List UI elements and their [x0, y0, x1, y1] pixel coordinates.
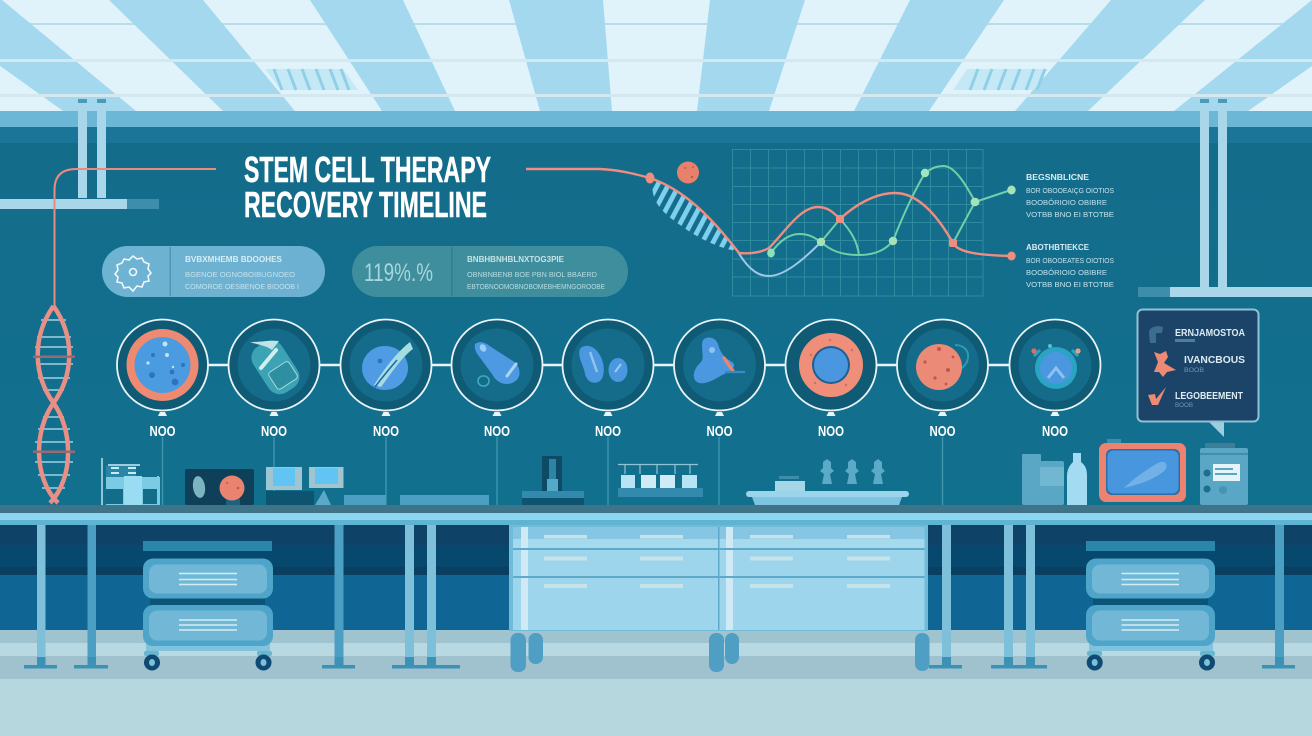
- green curve: [771, 166, 1011, 255]
- ceiling: [0, 0, 1312, 111]
- icon: gear cell: [115, 256, 151, 291]
- pill: cell summary: BVBXMHEMB BDOOHES: [185, 255, 283, 264]
- stage 2: capsule device: NOO: [261, 423, 287, 440]
- callout panel: [1138, 310, 1258, 437]
- pill: percentage: BNBHBNHBLNXTOG3PIE: [467, 255, 565, 264]
- stage 4: elongated cell: NOO: [484, 423, 510, 440]
- equipment: analyser device: [1200, 443, 1248, 505]
- stage 5: dividing cells: NOO: [595, 423, 621, 440]
- stage 2: capsule device: [228, 320, 320, 440]
- equipment: cabinet and bottle: [1022, 453, 1087, 505]
- data points: [646, 169, 1016, 260]
- ceiling vent left: [265, 69, 358, 90]
- pill: percentage: [352, 246, 628, 297]
- stage 7: ringed cell: NOO: [818, 423, 844, 440]
- equipment: salmon monitor: [1099, 439, 1186, 502]
- stage 9: regenerated cell: NOO: [1042, 423, 1068, 440]
- equipment: monitors and flask: [266, 467, 489, 505]
- stage 4: elongated cell: [452, 320, 542, 440]
- equipment: column press: [522, 456, 584, 505]
- icon: callout item one: [1149, 326, 1163, 343]
- stem lines: [162, 437, 942, 505]
- stage 6: cell with marker: [674, 320, 765, 440]
- pipes right: [1138, 99, 1312, 297]
- callout panel: BOOB: [1175, 403, 1193, 409]
- blue curve: [738, 242, 821, 276]
- DNA helix: [33, 306, 75, 503]
- ceiling vent right: [953, 69, 1048, 90]
- stage 5: dividing cells: [562, 320, 654, 440]
- chart legend top: [1026, 173, 1114, 219]
- pill: percentage: EBTOBNOOMOBNOBOMEBHEMNGOROOBE: [467, 282, 605, 291]
- stage 7: ringed cell: [786, 320, 876, 440]
- hatched area: [651, 179, 736, 251]
- central drawer unit: [509, 525, 928, 631]
- icon: floating cell: [677, 162, 699, 184]
- stage 9: regenerated cell: [1010, 320, 1100, 440]
- wheels: [1087, 654, 1215, 670]
- title: [244, 149, 491, 225]
- icon: callout checkmark: [1148, 387, 1166, 405]
- chart legend bottom: ABOTHBTIEKCE: [1026, 243, 1090, 252]
- pill: cell summary: COMOROE OESBENOE BIDOOB I: [185, 282, 299, 291]
- chart legend bottom: BOR OBOOEATES OIOTIOS: [1026, 256, 1114, 265]
- recovery chart: [526, 149, 1016, 296]
- lower wall: [0, 525, 1312, 630]
- title: RECOVERY TIMELINE: [244, 184, 487, 225]
- chart legend top: BOOBÓRIOIO OBIBRE: [1026, 198, 1107, 207]
- drawer unit feet: [510, 633, 930, 672]
- timeline connector: [208, 364, 1010, 366]
- cart left: [143, 541, 273, 670]
- stage 3: cell and pipette: NOO: [373, 423, 399, 440]
- chart legend top: VOTBB BNO EI BTOTBE: [1026, 210, 1114, 219]
- wheels: [144, 654, 272, 670]
- pill: cell summary: BGENOE OGNOBOIBUGNOEO: [185, 270, 295, 279]
- cart right: [1086, 541, 1215, 670]
- callout panel: ERNJAMOSTOA: [1175, 327, 1245, 339]
- chart legend bottom: BOOBÓRIOIO OBIBRE: [1026, 268, 1107, 277]
- countertop: [0, 505, 1312, 525]
- equipment: bottle rack: [618, 464, 703, 497]
- equipment: glassware rack: [102, 458, 160, 505]
- stage 6: cell with marker: NOO: [706, 423, 733, 440]
- chart legend top: BEGSNBLICNE: [1026, 173, 1090, 182]
- equipment: lab tray with valves: [746, 459, 909, 505]
- grid: [732, 149, 983, 296]
- callout panel: LEGOBEEMENT: [1175, 390, 1243, 402]
- pill: percentage: 119%.%: [364, 259, 433, 287]
- stage 1: stem cell: [117, 320, 208, 440]
- pill: cell summary: [102, 246, 325, 297]
- floor: [0, 630, 1312, 736]
- equipment: dark imaging box: [185, 469, 254, 505]
- stage 1: stem cell: NOO: [150, 423, 176, 440]
- callout panel: IVANCBOUS: [1184, 354, 1245, 366]
- stage 3: cell and pipette: [340, 320, 432, 440]
- chart legend bottom: [1026, 243, 1114, 289]
- stage 8: mature cell: NOO: [930, 423, 956, 440]
- title: STEM CELL THERAPY: [244, 149, 491, 190]
- wall: [0, 111, 1312, 505]
- pipes left: [0, 99, 159, 209]
- counter legs: [24, 525, 1295, 668]
- chart legend top: BOR OBOOEAIÇG OIOTIOS: [1026, 186, 1114, 195]
- salmon curve: [526, 169, 1011, 256]
- chart legend bottom: VOTBB BNO EI BTOTBE: [1026, 280, 1114, 289]
- icon: callout item two: [1154, 351, 1176, 377]
- stage 8: mature cell: [897, 320, 988, 440]
- pill: percentage: OBNBNBENB BOE PBN BIOL BBAERD: [467, 270, 598, 279]
- callout panel: BOOB: [1184, 368, 1204, 374]
- connector line to DNA: [54, 169, 216, 306]
